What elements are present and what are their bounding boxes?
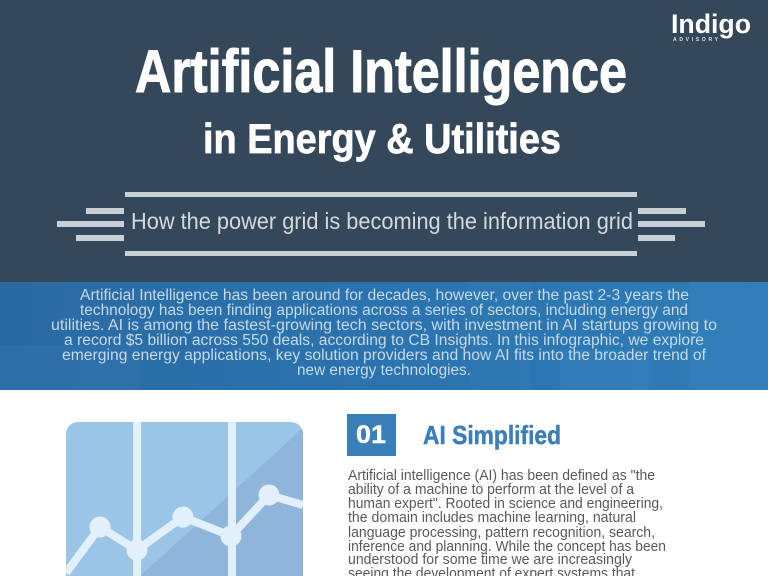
section body text: language processing, pattern recognition, search, [348, 524, 655, 541]
title: Artificial Intelligence [135, 38, 627, 105]
intro text: new energy technologies. [297, 362, 471, 379]
intro text [51, 287, 717, 379]
intro text: utilities. AI is among the fastest-growing tech sectors, with investment in AI startups growing to [51, 317, 717, 334]
logo: Indigo Advisory: ADVISORY [673, 37, 719, 43]
section body text: understood for some time we are increasingly [348, 551, 632, 568]
intro text: a record $5 billion across 550 deals, according to CB Insights. In this infographic, we explore [64, 332, 704, 349]
section body text: Artificial intelligence (AI) has been defined as "the [348, 467, 655, 484]
intro text: Artificial Intelligence has been around for decades, however, over the past 2-3 years the [80, 287, 689, 304]
section number badge [347, 414, 396, 456]
tagline with grid lines: How the power grid is becoming the information grid [131, 208, 633, 234]
subtitle: in Energy & Utilities: in Energy & Utilities [203, 115, 561, 162]
header panel [0, 0, 768, 282]
section body text: human expert". Rooted in science and engineering, [348, 495, 663, 512]
section body text: inference and planning. While the concept has been [348, 538, 666, 555]
section body text [348, 467, 666, 576]
intro band [0, 282, 768, 390]
section body text: the domain includes machine learning, natural [348, 509, 636, 526]
logo: Indigo Advisory: Indigo [671, 9, 751, 39]
intro text: emerging energy applications, key solution providers and how AI fits into the broader trend of [62, 347, 707, 364]
section number badge: 01 [356, 421, 386, 449]
section body text: ability of a machine to perform at the level of a [348, 481, 635, 498]
icon: line chart panel [66, 422, 303, 576]
section heading: AI Simplified [423, 420, 561, 450]
intro text: technology has been finding applications across a series of sectors, including energy and [80, 302, 688, 319]
tagline with grid lines [57, 192, 705, 256]
